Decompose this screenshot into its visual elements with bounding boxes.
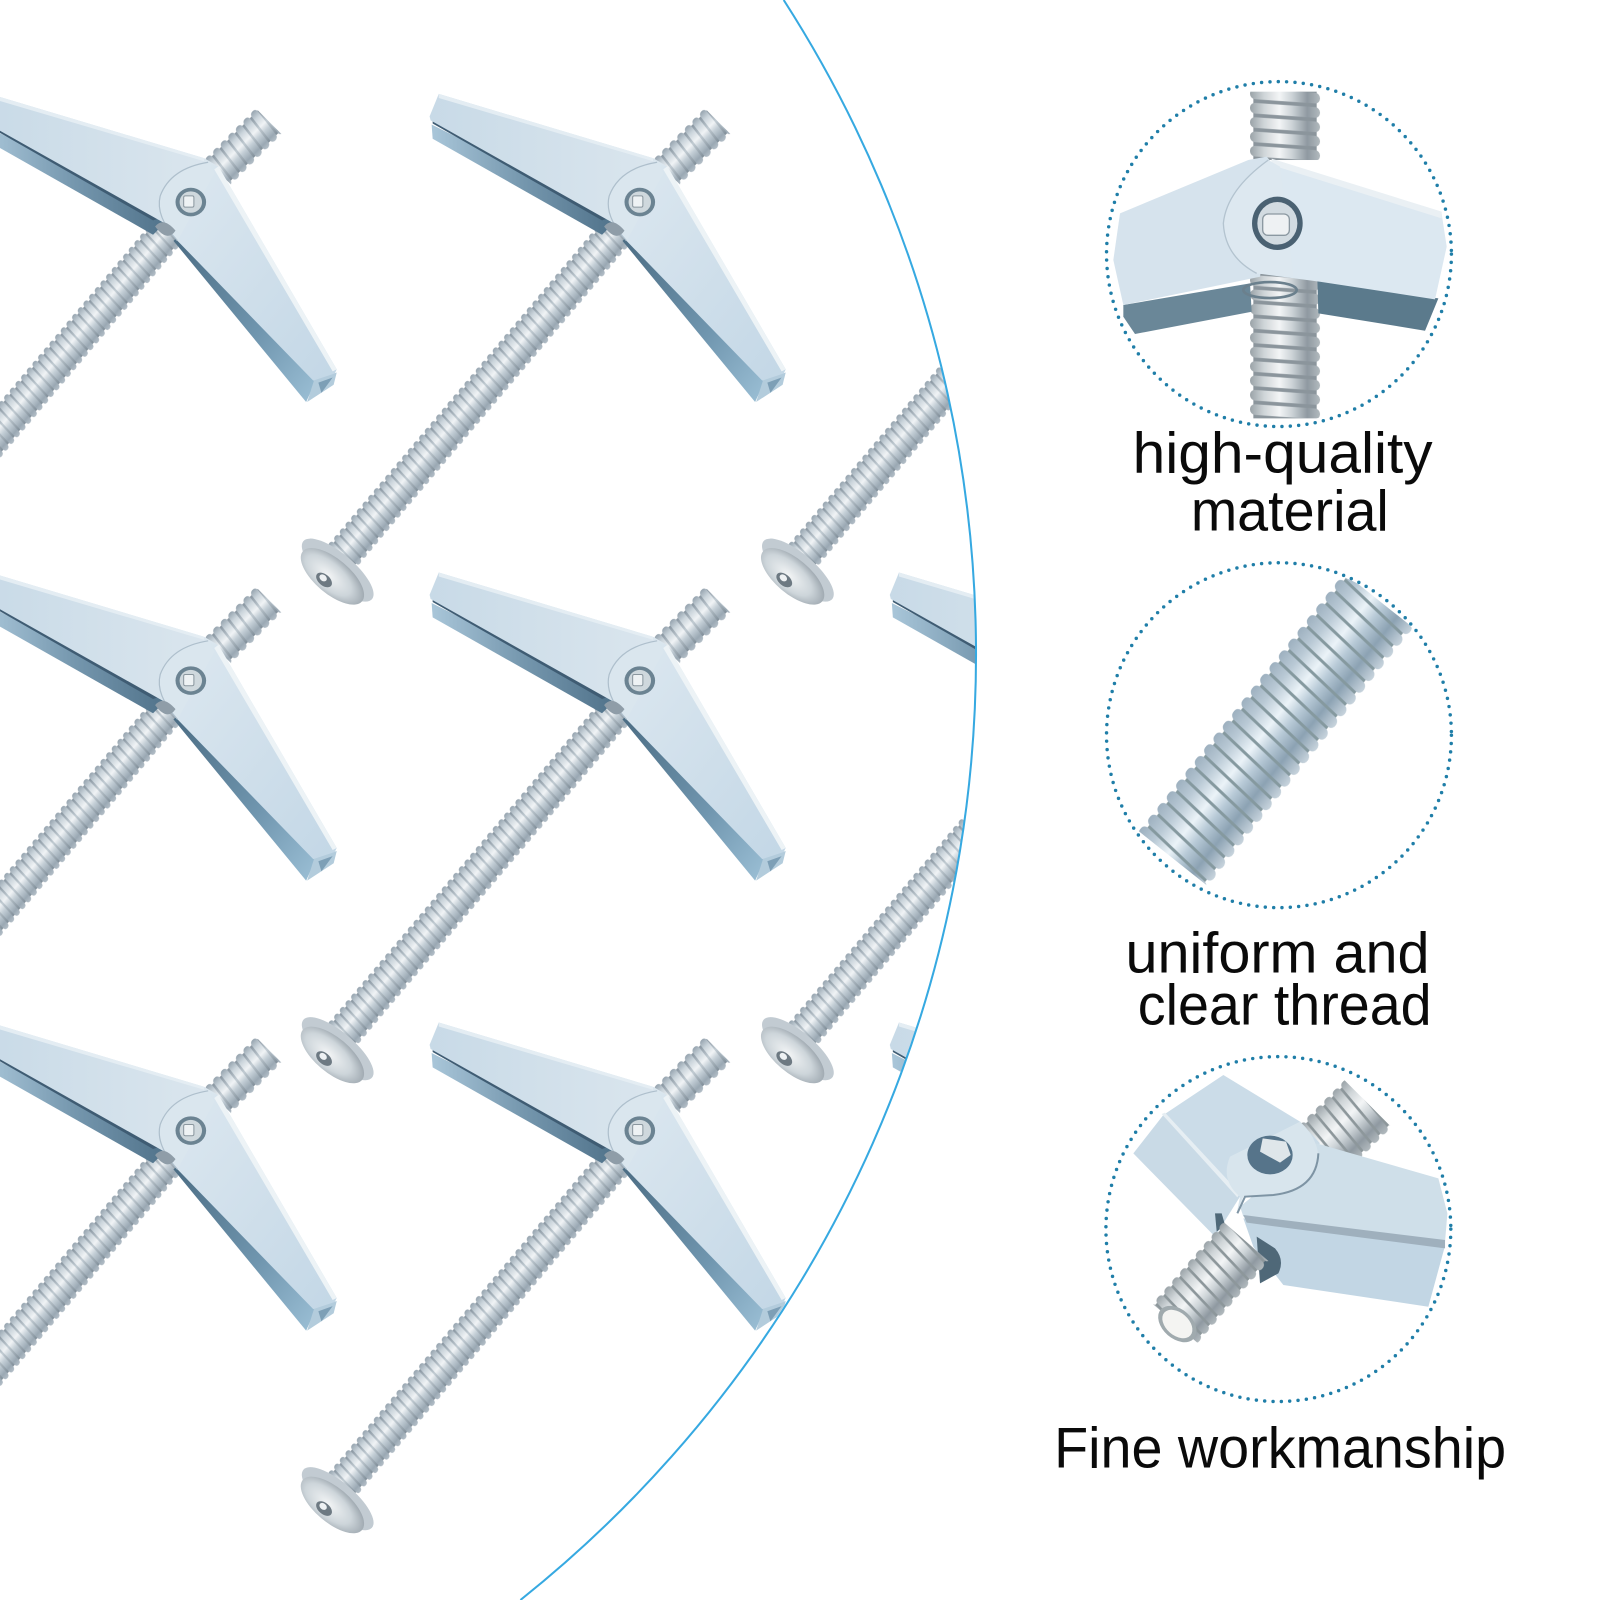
photo: folded wings closeup [1133,1075,1447,1350]
panel: fine workmanship detail [1106,1057,1451,1402]
panel: repeated toggle bolts collage [0,94,1246,1547]
heading: high-quality material: material [1191,480,1389,544]
toggle bolt row 3 right [747,1022,1246,1547]
dotted circle 2 [1107,563,1451,908]
panel: uniform and clear thread detail [1107,563,1451,908]
toggle bolt row 2 centre [287,572,786,1097]
heading: high-quality material [1133,421,1433,544]
heading: fine workmanship: Fine workmanship [1054,1416,1506,1480]
blue arc border [520,0,976,1600]
toggle bolt row 1 centre [287,94,786,619]
dotted circle 1 [1107,82,1451,427]
dotted circle 3 [1106,1057,1451,1402]
heading: uniform and clear thread: uniform and [1126,921,1430,985]
heading: uniform and clear thread: clear thread [1138,973,1432,1037]
photo: hinge closeup [1113,92,1447,418]
toggle bolt row 1 right [747,94,1246,619]
toggle bolt row 2 right [747,572,1246,1097]
heading: uniform and clear thread [1126,921,1432,1037]
toggle bolt row 3 left [0,1022,337,1547]
heading: high-quality material: high-quality [1133,421,1433,485]
panel: high-quality material detail [1107,82,1451,427]
toggle bolt row 1 left [0,94,337,619]
toggle bolt row 3 centre [287,1022,786,1547]
toggle bolt row 2 left [0,572,337,1097]
photo: thread closeup [1139,573,1413,886]
